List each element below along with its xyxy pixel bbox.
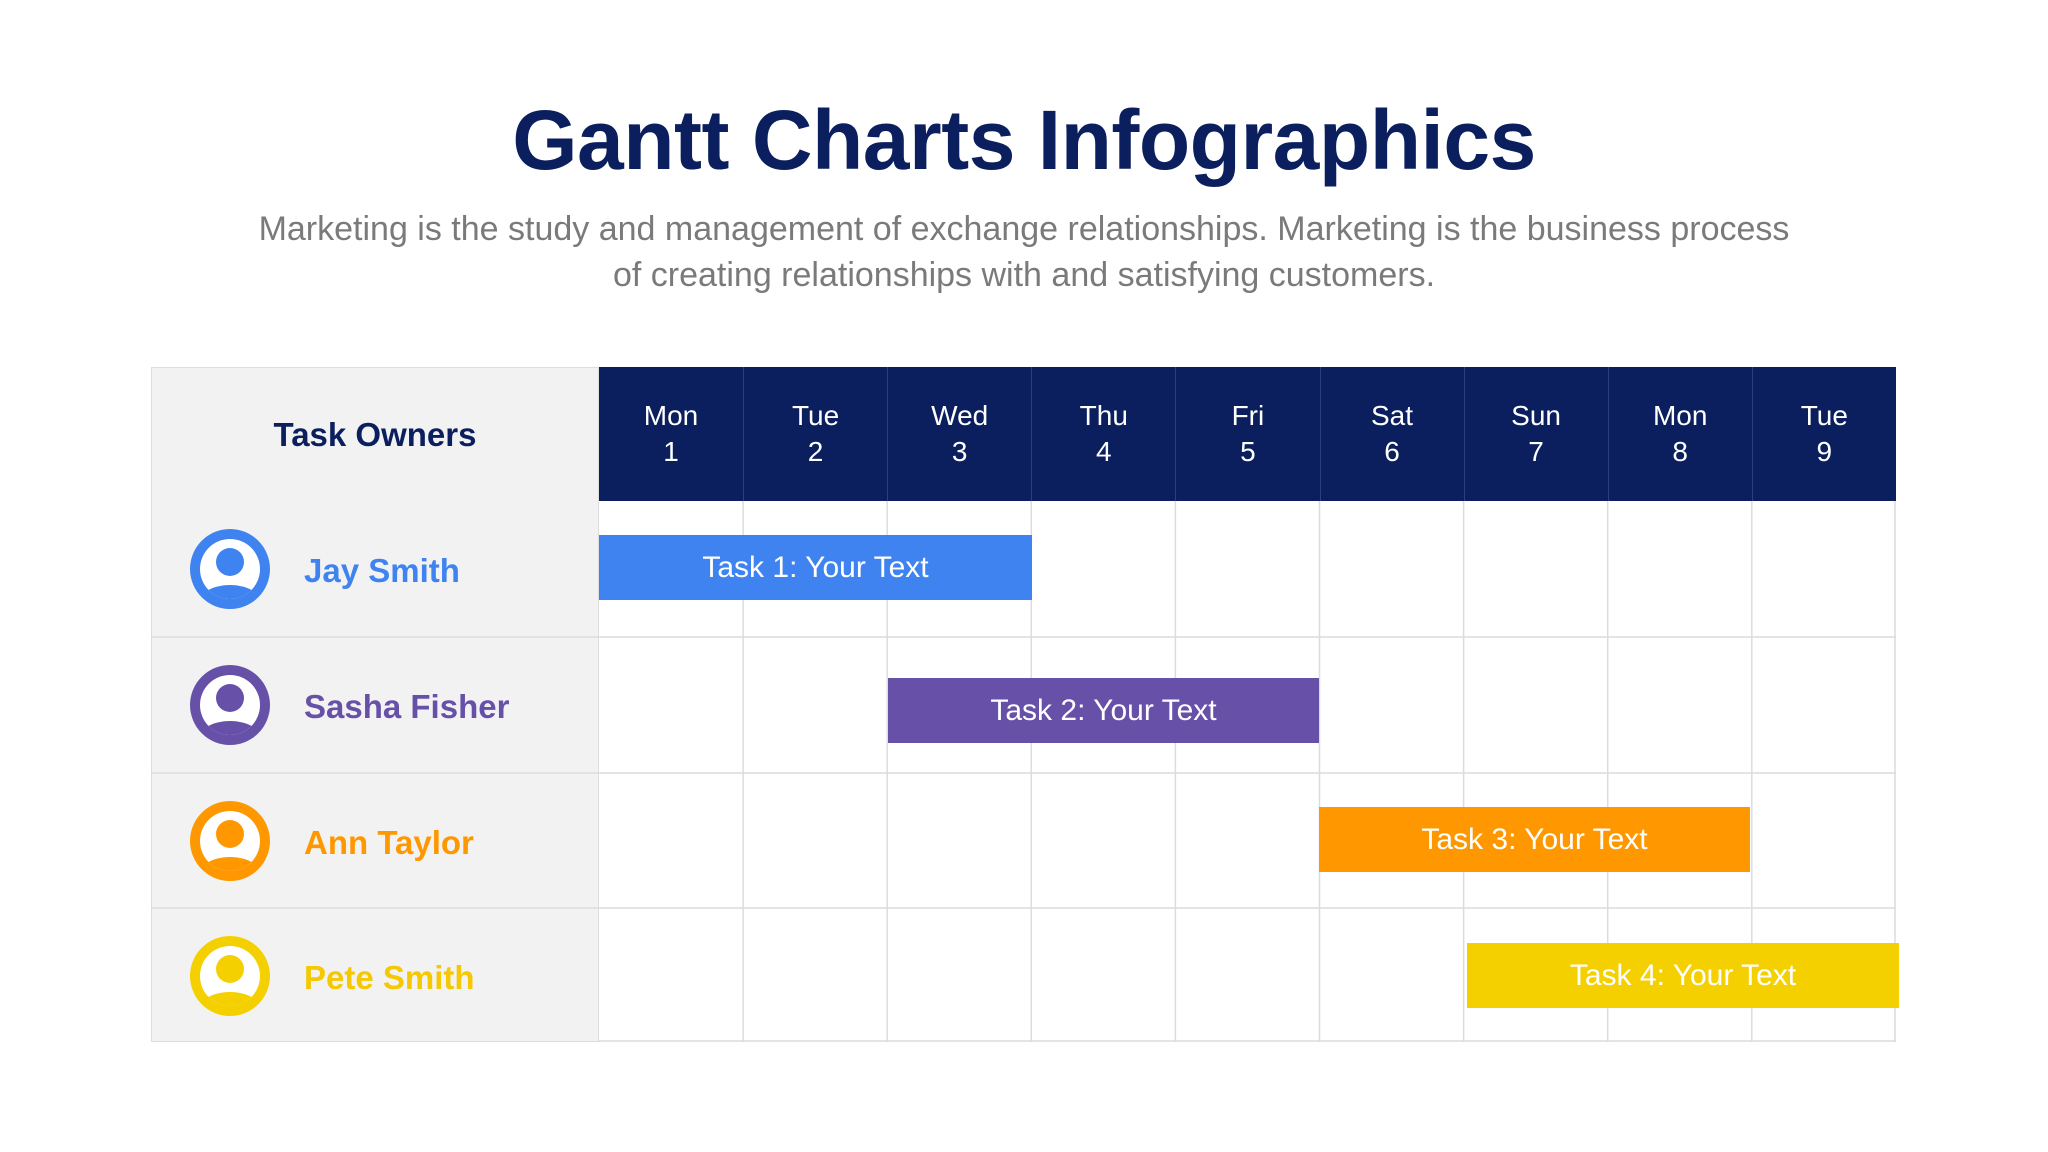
heading: Task Owners: Task Owners xyxy=(274,416,476,453)
icon: person blue xyxy=(190,529,270,609)
header: days: Thu xyxy=(1080,400,1128,431)
icon: person yellow xyxy=(190,936,270,1016)
name: Sasha Fisher xyxy=(304,688,509,725)
name: Jay Smith xyxy=(304,552,460,589)
owner: Pete Smith xyxy=(190,936,475,1016)
owner: Sasha Fisher xyxy=(190,665,509,745)
header: days: Mon xyxy=(1653,400,1707,431)
header: days: Wed xyxy=(931,400,988,431)
bar: task 2: Task 2: Your Text xyxy=(990,694,1217,726)
bar: task 4: Task 4: Your Text xyxy=(1570,958,1796,992)
header: days: 6 xyxy=(1384,436,1400,467)
header: days: 2 xyxy=(808,436,823,467)
owner: Jay Smith xyxy=(190,529,460,609)
header: days: 7 xyxy=(1528,436,1544,467)
name: Pete Smith xyxy=(304,959,475,996)
icon: person orange xyxy=(190,801,270,881)
header: days: Mon xyxy=(644,400,698,431)
bar: task 1: Task 1: Your Text xyxy=(702,550,929,584)
owner: Ann Taylor xyxy=(190,801,474,881)
header: days: Tue xyxy=(792,400,839,431)
header: days xyxy=(599,367,1896,501)
header: days: Sat xyxy=(1371,400,1413,431)
title: Gantt Charts Infographics xyxy=(512,93,1536,187)
header: days: Tue xyxy=(1801,400,1848,431)
panel: task owners column xyxy=(151,367,599,1042)
bar: task 3: Task 3: Your Text xyxy=(1421,822,1648,856)
header: days: Sun xyxy=(1511,400,1561,431)
header: days: 5 xyxy=(1240,436,1256,467)
header: days: 3 xyxy=(952,436,967,467)
bar: task 2 xyxy=(888,678,1319,743)
header: days: 1 xyxy=(663,436,679,467)
icon: person purple xyxy=(190,665,270,745)
bar: task 4 xyxy=(1467,943,1899,1008)
bar: task 1 xyxy=(599,535,1032,600)
subtitle: Marketing is the study and management of exchange relationships. Marketing is the business process of creating relationships with and satisfying customers. xyxy=(259,210,1789,294)
grid lines xyxy=(599,501,1896,1042)
header: days: 9 xyxy=(1816,436,1832,467)
bar: task 3 xyxy=(1319,807,1750,872)
name: Ann Taylor xyxy=(304,824,474,861)
header: days: Fri xyxy=(1232,400,1264,431)
header: days: 8 xyxy=(1672,436,1688,467)
row dividers in left column xyxy=(152,636,598,909)
header: days: 4 xyxy=(1096,436,1112,467)
